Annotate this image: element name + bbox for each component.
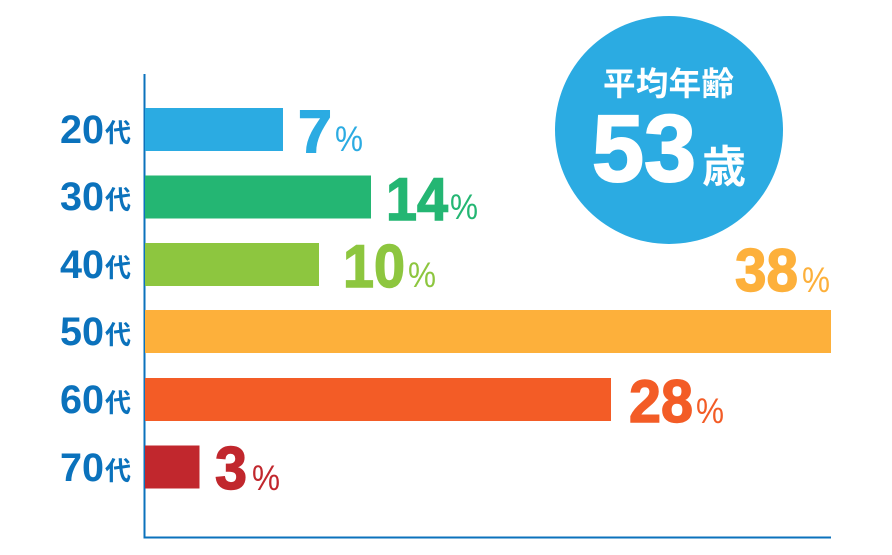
value: 38%: %	[802, 261, 830, 300]
value: 3%: 3	[215, 435, 247, 502]
label: 60代	[60, 378, 131, 422]
label: 30代	[60, 175, 131, 219]
label: 40代	[60, 243, 131, 287]
label: 30代: 代	[105, 185, 131, 215]
label: 50代: 代	[105, 320, 131, 350]
bar: 30代 14%	[60, 166, 478, 233]
value: 38%: 38	[735, 237, 798, 304]
label: 70代: 代	[105, 456, 131, 486]
bar 40代	[145, 243, 319, 286]
value: 10%: 10	[343, 233, 405, 300]
label: 20代	[60, 108, 131, 152]
label: 50代: 50	[60, 310, 104, 354]
bar 50代	[145, 310, 831, 353]
label: 70代: 70	[60, 446, 104, 490]
label: 40代: 代	[105, 253, 131, 283]
bar: 70代 3%	[60, 435, 280, 502]
label: 30代: 30	[60, 175, 104, 219]
chart axes	[144, 74, 831, 538]
value: 3%	[215, 435, 280, 502]
value: 28%: %	[696, 392, 724, 431]
callout number: 53	[592, 96, 696, 202]
callout heading: 平均年齢	[603, 66, 734, 102]
value: 7%	[298, 98, 363, 165]
callout circle	[555, 16, 783, 244]
bar 20代	[145, 108, 283, 151]
value: 10%: %	[408, 256, 436, 295]
value: 7%: %	[335, 120, 363, 159]
label: 20代: 20	[60, 108, 104, 152]
bar: 50代 38%	[60, 237, 831, 354]
callout unit: 歳	[702, 143, 746, 192]
callout: average age 53	[555, 16, 783, 244]
bar 30代	[145, 176, 371, 218]
label: 40代: 40	[60, 243, 104, 287]
label: 20代: 代	[105, 118, 131, 148]
value: 28%: 28	[629, 368, 693, 435]
bar: 40代 10%	[60, 233, 436, 300]
label: 60代: 代	[105, 388, 131, 418]
value: 14%: 14	[386, 166, 449, 233]
value: 7%: 7	[298, 98, 332, 165]
value: 14%: %	[450, 188, 478, 227]
label: 60代: 60	[60, 378, 104, 422]
label: 50代	[60, 310, 131, 354]
value: 3%: %	[252, 459, 280, 498]
bar 60代	[145, 378, 611, 421]
bar: 60代 28%	[60, 368, 724, 435]
bar: 20代 7%	[60, 98, 363, 165]
label: 70代	[60, 446, 131, 490]
bar 70代	[145, 446, 200, 488]
